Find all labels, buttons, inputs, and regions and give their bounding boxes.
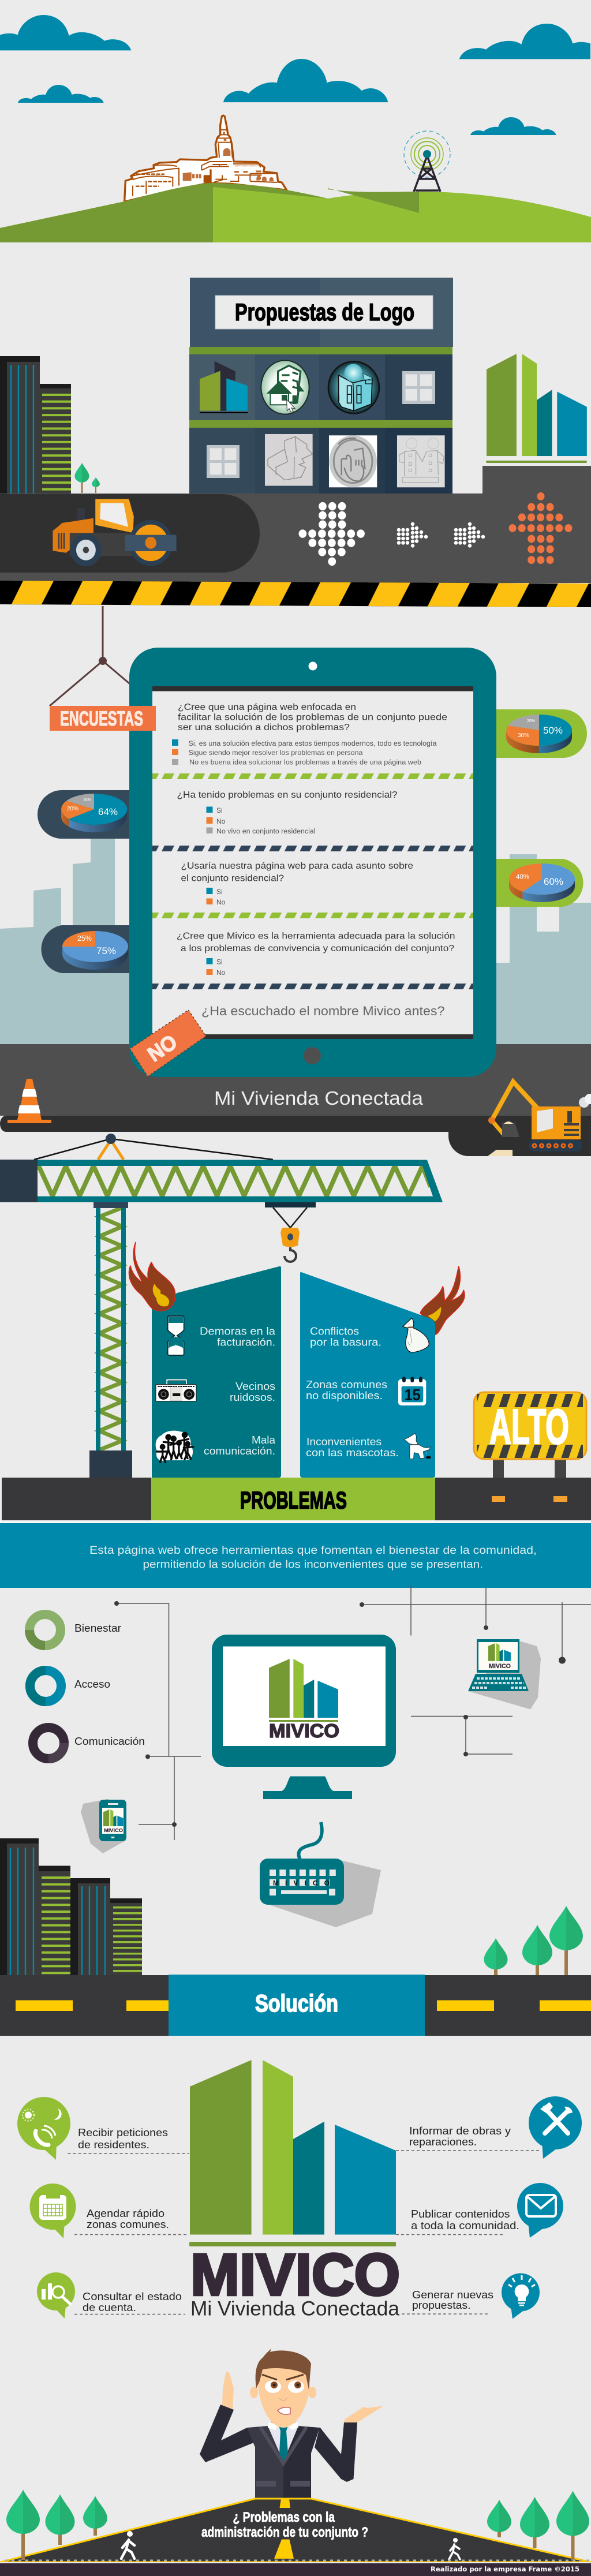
jacket right [283, 2426, 320, 2500]
phone [81, 1799, 126, 1853]
question 3: No [216, 898, 226, 906]
pie chart: 50%: 50% [543, 725, 563, 736]
feature: Recibir peticiones: de residentes. [78, 2139, 149, 2151]
eyebrows [262, 2375, 304, 2380]
question 4: a los problemas de convivencia y comunicación del conjunto? [181, 944, 454, 954]
kerb line [0, 2562, 591, 2563]
left sleeve [200, 2405, 255, 2462]
keyboard: MIVICO [273, 1879, 330, 1887]
tab: pie 1 backing [470, 709, 587, 758]
logo option 3 [328, 361, 379, 413]
ground [2, 1478, 591, 1521]
footer bar: Realizado por la empresa Frame ©2015 [431, 2565, 579, 2573]
ears [250, 2387, 316, 2398]
heading band: PROBLEMAS: PROBLEMAS [240, 1487, 347, 1513]
pie chart: 75%: 25% [77, 934, 92, 943]
donut: Acceso [30, 1670, 110, 1702]
road marks [274, 2499, 294, 2559]
donut: Comunicación: Comunicación [74, 1736, 145, 1747]
mouth [278, 2407, 290, 2414]
question 3 [181, 861, 413, 906]
feature: Publicar contenidos [411, 2183, 563, 2238]
question 1: ser una solución a dichos problemas? [178, 723, 350, 732]
problem: Vecinos ruidosos: ruidosos. [230, 1391, 275, 1403]
feature: Generar nuevas [412, 2273, 540, 2319]
logo underbar [189, 2242, 396, 2246]
sketch logo C [397, 435, 445, 487]
pie chart: 64%: 64% [98, 806, 118, 817]
problem: Conflictos por la basura [310, 1318, 429, 1352]
pie chart: 60%: 40% [516, 874, 529, 881]
crane jib [0, 1160, 443, 1202]
floor cells [189, 347, 452, 493]
feature: Informar de obras [409, 2096, 582, 2159]
question 3: ¿Usaría nuestra página web para cada asunto sobre [181, 861, 413, 871]
icon: walker right [449, 2538, 460, 2559]
crane top node [106, 1134, 116, 1144]
shirt [268, 2424, 298, 2463]
pockets [256, 2481, 310, 2487]
question 1: Sigue siendo mejor resolver los problemas en persona [188, 750, 363, 757]
pie chart: 64%: 20% [67, 806, 78, 812]
connector lines [68, 2151, 541, 2315]
icon: orange dotted arrow up [513, 496, 568, 560]
feature: Publicar contenidos: Publicar contenidos [411, 2208, 510, 2220]
pie chart: 60%: 60% [544, 876, 563, 887]
window [207, 445, 240, 478]
feature: Informar de obras: Informar de obras y [409, 2125, 511, 2137]
problem: Inconvenientes con las mascotas: Inconvenientes [306, 1435, 381, 1448]
question 2: Si [216, 806, 223, 814]
nose [279, 2398, 287, 2401]
lapels [260, 2427, 306, 2463]
intro band: permitiendo la solución de los inconvenientes que se presentan. [143, 1558, 483, 1571]
question 3: Si [216, 888, 223, 896]
circuit lines [117, 1586, 591, 1840]
building header [190, 278, 453, 347]
window [402, 371, 435, 404]
rope knot [99, 657, 107, 665]
laptop: MIVICO [489, 1663, 511, 1670]
pie chart: 64%: 16% [83, 798, 91, 802]
crane A-frame [98, 1140, 124, 1160]
problem: Vecinos ruidosos: Vecinos [235, 1380, 275, 1392]
problem: Conflictos por la basura: por la basura. [310, 1336, 381, 1348]
feature: Informar de obras: reparaciones. [409, 2136, 477, 2148]
crane cables [34, 1139, 273, 1160]
problem: Demoras en la facturación: Demoras en la [200, 1325, 276, 1337]
road with roller [0, 466, 591, 583]
pie chart: 50%: 30% [518, 732, 529, 739]
tall building [0, 356, 40, 493]
icon: traffic cone [8, 1079, 51, 1123]
question 1: No es buena idea solucionar los problemas a través de una página web [189, 760, 421, 767]
road dark strip [0, 1116, 591, 1156]
problem: Zonas comunes no disponibles: no disponibles. [306, 1389, 383, 1401]
pie chart: 75%: 75% [96, 945, 116, 956]
tab: pie 4 backing [41, 925, 156, 973]
small cloud right [470, 117, 556, 135]
feature: Generar nuevas: propuestas. [412, 2300, 471, 2311]
tablet [129, 648, 496, 1077]
sign: ALTO [474, 1392, 586, 1459]
divider green [152, 913, 473, 918]
right flame [420, 1266, 465, 1335]
icon: church on hill [125, 115, 287, 201]
crane hook [265, 1202, 316, 1262]
question 1: ¿Cree que una página web enfocada en [178, 702, 356, 712]
problem: Inconvenientes con las mascotas [306, 1433, 431, 1459]
icon: calendar: 15 [405, 1386, 421, 1404]
question 1: facilitar la solución de los problemas de un conjunto puede [178, 712, 447, 723]
icon: dog [404, 1433, 431, 1459]
tab: pie 2 backing [38, 790, 156, 839]
sketch logo A [265, 434, 313, 486]
footer bar [0, 2563, 591, 2576]
feature: Agendar rápido [30, 2184, 169, 2238]
panel: closing hill [0, 2490, 591, 2576]
problem: Zonas comunes no disponibles: Zonas comunes [306, 1378, 387, 1390]
donut: Bienestar [29, 1614, 121, 1646]
feature: Consultar el estado: Consultar el estado [83, 2291, 182, 2302]
eyes [265, 2380, 304, 2393]
hills [0, 183, 591, 242]
cloud center [223, 59, 388, 102]
problem: Mala comunicación [156, 1431, 276, 1462]
phone: MIVICO [104, 1828, 123, 1833]
small cloud left [18, 85, 104, 103]
stop sign posts [493, 1460, 566, 1497]
open hand [344, 2406, 384, 2422]
feature: Generar nuevas: Generar nuevas [412, 2289, 493, 2301]
logo option 1 [200, 361, 248, 413]
icon: boombox [156, 1380, 196, 1401]
problem: Inconvenientes con las mascotas: con las mascotas. [306, 1446, 399, 1459]
trees right [487, 2491, 589, 2560]
feature: Recibir peticiones: Recibir peticiones [78, 2127, 168, 2138]
crane tower [89, 1202, 132, 1478]
icon: trash bag [403, 1318, 429, 1352]
icon: small dotted arrow right [456, 524, 483, 549]
panel: problems left [152, 1266, 281, 1478]
heading band: Solución: Solución [255, 1990, 338, 2017]
feature: Consultar el estado: de cuenta. [83, 2302, 136, 2313]
divider dark [152, 846, 473, 851]
feature: Consultar el estado [37, 2272, 182, 2319]
pie chart: 75% [62, 931, 128, 970]
road hill [0, 2499, 591, 2562]
question 4: Si [216, 958, 223, 966]
icon: white dotted arrow down [302, 506, 362, 562]
problem: Conflictos por la basura: Conflictos [310, 1325, 359, 1337]
question 1: Si, es una solución efectiva para estos tiempos modernos, todo es tecnología [188, 741, 437, 747]
tag: ENCUESTAS [50, 706, 156, 731]
circuit nodes [114, 1601, 566, 1827]
question 2: ¿Ha tenido problemas en su conjunto residencial? [177, 790, 398, 800]
feature: Agendar rápido: Agendar rápido [87, 2208, 164, 2219]
panel: solution section [0, 1520, 591, 2036]
trees left [6, 2490, 107, 2560]
feature: Publicar contenidos: a toda la comunidad. [411, 2220, 519, 2231]
left flame [129, 1242, 175, 1311]
question 2 [177, 790, 398, 835]
wordmark: MIVICO: MIVICO [190, 2242, 400, 2308]
intro band [0, 1523, 591, 1588]
background city [0, 839, 591, 1044]
tagline: Mi Vivienda Conectada: Mi Vivienda Conectada [214, 1087, 424, 1109]
closing question: ¿ Problemas con la [233, 2510, 335, 2525]
pie chart: 50% [506, 715, 572, 753]
question 4: No [216, 969, 226, 977]
hanging rope [50, 606, 156, 706]
intro band: Esta página web ofrece herramientas que fomentan el bienestar de la comunidad, [89, 1545, 537, 1557]
divider dark [152, 984, 473, 989]
big logo [190, 2060, 396, 2235]
collar [268, 2422, 298, 2430]
question 4: ¿Cree que Mivico es la herramienta adecuada para la solución [177, 932, 455, 941]
short building [40, 384, 71, 493]
laptop [468, 1639, 541, 1710]
icon: antenna tower [404, 131, 450, 192]
heading band: PROBLEMAS [151, 1478, 435, 1521]
icon: excavator [488, 1082, 591, 1156]
panel: landscape header [0, 15, 591, 242]
stamp: NO [130, 1010, 206, 1076]
panel: city left [0, 356, 100, 493]
panel: problems right [300, 1272, 435, 1478]
question 2: No vivo en conjunto residencial [216, 828, 315, 835]
closing question [201, 2510, 368, 2540]
road pill [0, 494, 260, 573]
donut: Comunicación [33, 1728, 145, 1759]
divider green [152, 773, 473, 779]
icon: crowd [156, 1431, 193, 1462]
pie chart: 64% [61, 794, 127, 832]
road band [0, 1044, 591, 1116]
tagline: Mi Vivienda Conectada [190, 2297, 400, 2320]
pie chart: 60% [509, 863, 575, 902]
dotted kerb [5, 2559, 591, 2562]
jacket left [247, 2426, 283, 2500]
donut: Bienestar: Bienestar [74, 1622, 121, 1634]
panel: survey [0, 606, 591, 1156]
question 2: No [216, 817, 226, 825]
question 4 [177, 932, 455, 977]
icon: road roller [53, 499, 177, 566]
hair [256, 2349, 311, 2390]
icon: small dotted arrow right [399, 524, 426, 549]
cloud top left [0, 15, 131, 50]
panel: MIVICO features [17, 2060, 582, 2320]
heading band: Solución [169, 1975, 425, 2036]
monitor: MIVICO [269, 1720, 339, 1741]
city buildings [0, 1838, 142, 1975]
donut: Acceso: Acceso [74, 1678, 110, 1690]
problem: Mala comunicación: comunicación. [204, 1445, 275, 1457]
road [0, 466, 591, 583]
post feet [492, 1496, 567, 1502]
closing question: administración de tu conjunto ? [201, 2525, 368, 2540]
panel: logo proposals building [189, 278, 453, 493]
white gap [0, 1520, 591, 1523]
character: businessman [200, 2349, 384, 2500]
logo option 2 [261, 360, 309, 414]
hazard stripe [0, 581, 591, 607]
cloud top right [459, 24, 590, 59]
large MIVICO building logo [486, 354, 587, 463]
face [258, 2364, 310, 2428]
right sleeve [315, 2422, 357, 2482]
icon: calendar [398, 1378, 426, 1405]
panel: crane and problems [0, 1134, 591, 1521]
question 3: el conjunto residencial? [181, 874, 284, 883]
raised hand [222, 2371, 234, 2410]
tag: ENCUESTAS: ENCUESTAS [60, 708, 143, 730]
feature: Recibir peticiones [17, 2097, 168, 2160]
neck [271, 2418, 296, 2432]
question 1 [172, 702, 447, 767]
tree [75, 463, 89, 493]
road [0, 1975, 591, 2036]
trees [484, 1906, 583, 1976]
keyboard [260, 1822, 381, 1927]
problem: Zonas comunes no disponibles [306, 1378, 426, 1405]
pie chart: 50%: 20% [527, 719, 535, 723]
sketch logo B [329, 435, 377, 487]
icon: walker left [121, 2531, 134, 2559]
icon: hourglass [168, 1316, 184, 1355]
small tree [92, 477, 100, 493]
stamp: NO: NO [143, 1030, 181, 1066]
tie [278, 2424, 289, 2461]
problem: Demoras en la facturación [168, 1316, 276, 1355]
feature: Agendar rápido: zonas comunes. [87, 2219, 169, 2230]
heading: Propuestas de Logo: Propuestas de Logo [235, 298, 414, 326]
monitor [212, 1635, 396, 1799]
problem: Mala comunicación: Mala [252, 1434, 276, 1446]
question 5: ¿Ha escuchado el nombre Mivico antes? [201, 1004, 444, 1018]
problem: Demoras en la facturación: facturación. [217, 1336, 275, 1348]
problem: Vecinos ruidosos [156, 1380, 275, 1403]
tab: pie 3 backing [470, 859, 583, 907]
